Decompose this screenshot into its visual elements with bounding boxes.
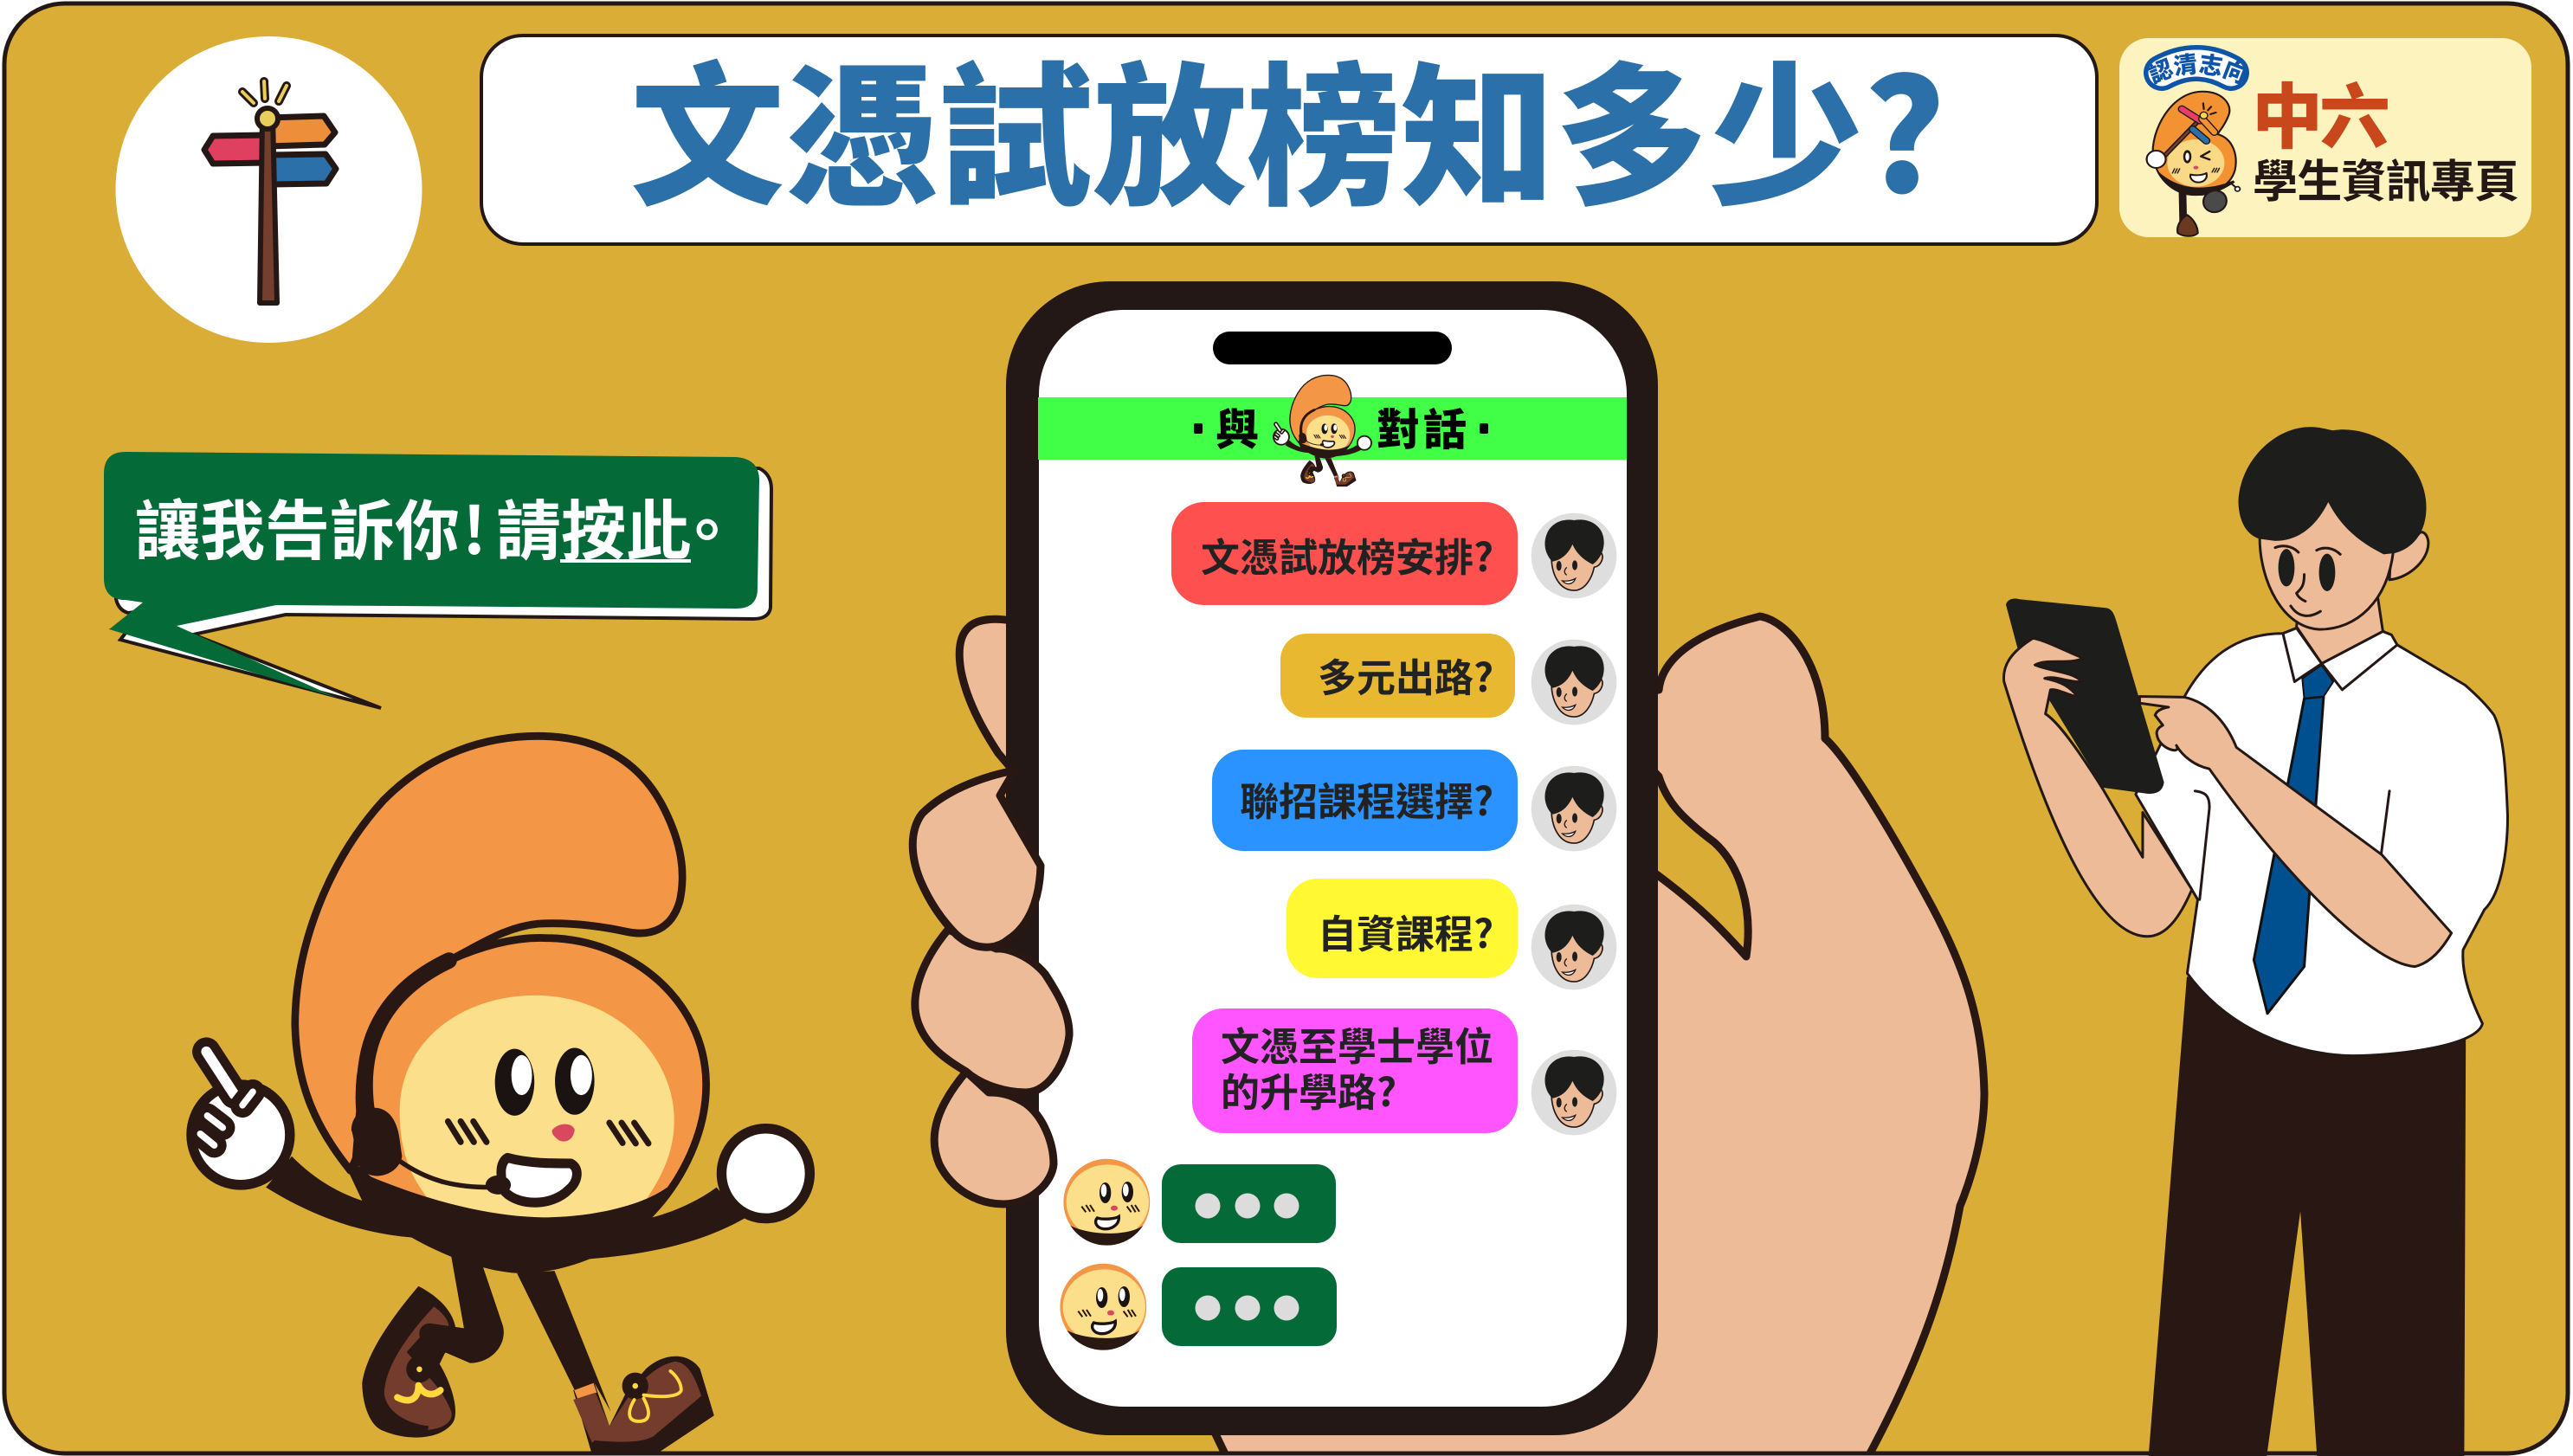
tie — [2254, 665, 2333, 1014]
chat bubble: 多元出路?: 多元出路? — [1318, 647, 1493, 703]
logo heading 中六: 中六 — [2252, 79, 2390, 158]
tablet — [2006, 598, 2164, 794]
man with tablet — [2003, 427, 2507, 1456]
mascot character — [191, 736, 809, 1454]
avatar — [1532, 640, 1616, 725]
ear — [2389, 532, 2428, 580]
face — [2260, 487, 2393, 629]
chat bubble: 自資課程?: 自資課程? — [1318, 903, 1493, 959]
pointing arm — [2139, 697, 2452, 967]
chat header: 對話 — [1377, 406, 1467, 454]
logo mascot — [2147, 92, 2240, 236]
speech text: ! — [462, 479, 487, 573]
badge: 認清志向: 認清志向 — [2149, 53, 2244, 85]
icon: signpost in white circle — [116, 36, 422, 343]
chat header — [1038, 375, 1627, 486]
avatar — [1532, 513, 1616, 598]
title text: 文憑試放榜知多少? — [630, 15, 1945, 237]
chat bubble: 聯招課程選擇? — [1212, 750, 1518, 851]
holding arm — [2003, 638, 2192, 937]
chat bubble: 文憑試放榜安排?: 文憑試放榜安排? — [1201, 526, 1493, 583]
chat bubble: 文憑至學士學位的升學路?: 的升學路? — [1221, 1061, 1396, 1118]
speech bubble — [104, 452, 771, 708]
speech text: 讓我告訴你 — [135, 495, 460, 568]
chat bubble: 多元出路? — [1280, 634, 1515, 718]
finger 4 — [934, 1072, 1054, 1204]
collar — [2283, 628, 2397, 690]
holding hand palm and thumb — [959, 616, 1984, 1456]
speech text: 。 — [674, 479, 739, 573]
chat bubble: 文憑試放榜安排? — [1171, 502, 1518, 605]
typing bubble 1 — [1162, 1164, 1336, 1243]
fingers over phone — [912, 770, 1069, 1204]
finger 3 — [915, 930, 1069, 1092]
phone — [1006, 281, 1658, 1435]
chat bubble: 自資課程? — [1286, 879, 1518, 978]
phone notch — [1213, 332, 1452, 364]
finger 2 — [912, 770, 1041, 947]
title box — [481, 15, 2097, 244]
finger: top behind phone — [959, 619, 1013, 770]
neck — [2297, 598, 2383, 664]
avatar — [1532, 905, 1616, 989]
shirt — [2136, 628, 2507, 1056]
avatar — [1532, 1050, 1616, 1135]
bot avatar — [1061, 1159, 1156, 1251]
hair — [2238, 427, 2427, 554]
chat header: 與 — [1216, 406, 1259, 454]
chat bubble: 文憑至學士學位的升學路?: 文憑至學士學位 — [1221, 1025, 1493, 1069]
logo panel — [2119, 38, 2531, 237]
speech text: 請按此 — [496, 495, 691, 568]
logo subtitle: 學生資訊專頁 — [2253, 158, 2519, 208]
chat bubble: 聯招課程選擇?: 聯招課程選擇? — [1240, 770, 1493, 827]
avatar — [1532, 766, 1616, 851]
typing bubble 2 — [1162, 1267, 1337, 1346]
bot avatar — [1057, 1264, 1152, 1356]
chat bubble: 文憑至學士學位的升學路? — [1192, 1008, 1518, 1133]
trousers — [2149, 976, 2466, 1456]
facial features — [2275, 546, 2340, 615]
